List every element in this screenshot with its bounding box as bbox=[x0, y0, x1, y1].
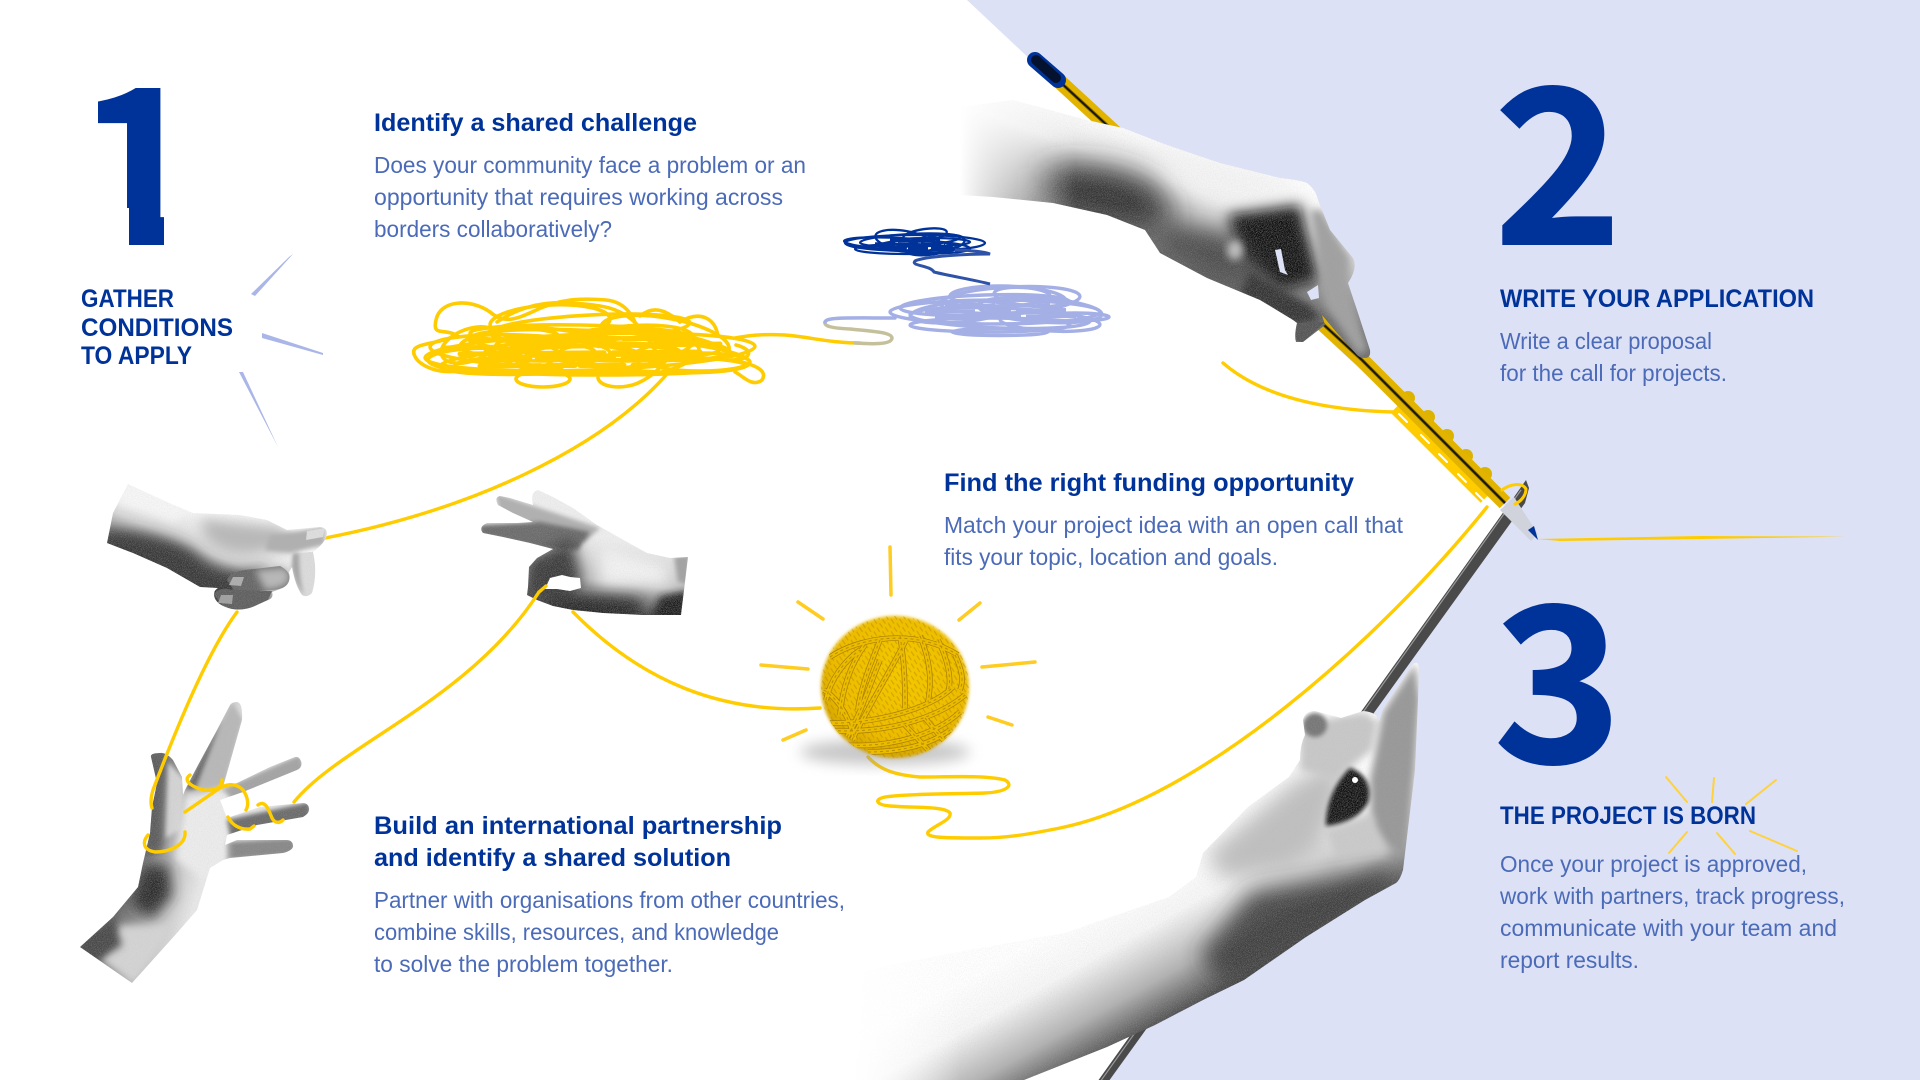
step 1 heading bbox=[81, 285, 233, 370]
text block: identify a shared challenge: opportunity that requires working across bbox=[374, 184, 783, 210]
step 3 text block: THE PROJECT IS BORN bbox=[1500, 802, 1756, 830]
dark blue tangled scribble bbox=[844, 226, 985, 259]
yarn ball bbox=[820, 615, 970, 760]
step 2 text block: Write a clear proposal bbox=[1500, 328, 1712, 354]
step 2 text block: WRITE YOUR APPLICATION bbox=[1500, 285, 1814, 313]
text block: build an international partnership: Partner with organisations from other countries, bbox=[374, 887, 845, 913]
step 1 number: 1 bbox=[76, 0, 203, 306]
text block: build an international partnership: combine skills, resources, and knowledge bbox=[374, 919, 779, 945]
lavender rays around step 1 bbox=[239, 254, 323, 447]
text block: find the right funding opportunity bbox=[944, 469, 1404, 570]
text block: find the right funding opportunity: fits your topic, location and goals. bbox=[944, 544, 1278, 570]
hand: centre pinching thread bbox=[481, 490, 688, 615]
step 1 heading: TO APPLY bbox=[81, 342, 192, 370]
yellow threads bbox=[258, 363, 1487, 838]
text block: identify a shared challenge: borders collaboratively? bbox=[374, 216, 612, 242]
stick: lower knitting needle bbox=[1095, 480, 1529, 1080]
yellow burst around project is born bbox=[1666, 777, 1797, 854]
hand: lower-left open palm with thread loops bbox=[75, 586, 546, 990]
thread trailing right from pencil tip bbox=[1537, 536, 1846, 541]
step 3 text block: report results. bbox=[1500, 947, 1639, 973]
connector dark blue to lavender bbox=[914, 250, 990, 284]
lavender tangled scribble bbox=[890, 283, 1109, 336]
step 3 text block: communicate with your team and bbox=[1500, 915, 1837, 941]
yarn ball rays bbox=[761, 547, 1035, 740]
yellow tangled scribble bbox=[414, 299, 764, 387]
thread loops on fingers bbox=[144, 586, 546, 852]
text block: identify a shared challenge bbox=[374, 109, 806, 242]
step 1 heading: CONDITIONS bbox=[81, 314, 233, 342]
step 2 number: 2 bbox=[1494, 0, 1622, 306]
step 2 text block: for the call for projects. bbox=[1500, 360, 1727, 386]
hand: top right holding pencil bbox=[955, 95, 1375, 365]
pencil bbox=[1035, 60, 1538, 541]
hand: bottom right holding needle bbox=[887, 662, 1419, 1080]
step 2 text block bbox=[1500, 285, 1814, 386]
background: white panel bbox=[0, 0, 1513, 1080]
step 3 text block: work with partners, track progress, bbox=[1499, 883, 1845, 909]
step 3 text block bbox=[1499, 802, 1845, 973]
hand: top-left holding thread bbox=[107, 484, 327, 610]
thread coiling around pencil bbox=[1399, 414, 1526, 504]
text block: find the right funding opportunity: Find the right funding opportunity bbox=[944, 469, 1354, 497]
step 3 text block: Once your project is approved, bbox=[1500, 851, 1807, 877]
text block: build an international partnership: to solve the problem together. bbox=[374, 951, 673, 977]
yarn ball shadow bbox=[800, 739, 970, 765]
text block: find the right funding opportunity: Match your project idea with an open call that bbox=[944, 512, 1404, 538]
text block: build an international partnership bbox=[374, 812, 845, 977]
step 1 heading: GATHER bbox=[81, 285, 174, 313]
text block: build an international partnership: and identify a shared solution bbox=[374, 844, 731, 872]
step 3 number: 3 bbox=[1494, 513, 1622, 824]
yarn connector yellow to lavender bbox=[735, 318, 895, 344]
text block: build an international partnership: Build an international partnership bbox=[374, 812, 782, 840]
text block: identify a shared challenge: Does your community face a problem or an bbox=[374, 152, 806, 178]
text block: identify a shared challenge: Identify a shared challenge bbox=[374, 109, 697, 137]
